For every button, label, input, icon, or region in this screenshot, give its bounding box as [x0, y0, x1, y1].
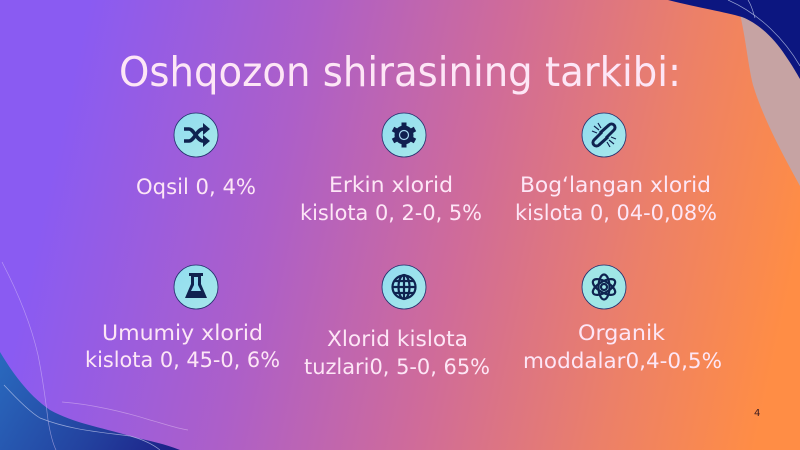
item: Xlorid kislota tuzlari: tuzlari0, 5-0, 65% — [304, 355, 490, 379]
icon: globe — [382, 265, 426, 309]
label: Umumiy xlorid — [102, 321, 263, 345]
item: Organik moddalar — [523, 265, 722, 373]
item: Organik moddalar: moddalar0,4-0,5% — [523, 349, 722, 373]
decoration: top right navy shape — [668, 0, 800, 79]
item: Xlorid kislota tuzlari — [304, 265, 490, 379]
item: Bog'langan xlorid kislota: kislota 0, 04-0,08% — [515, 201, 717, 225]
icon: broken chain — [582, 113, 626, 157]
label: Xlorid kislota — [327, 327, 468, 351]
item: Umumiy xlorid kislota — [85, 265, 280, 372]
icon: flask — [174, 265, 218, 309]
decoration: top right grey blob — [740, 14, 800, 186]
icon: gear — [382, 113, 426, 157]
item: Erkin xlorid kislota — [300, 113, 482, 225]
icon: shuffle arrows — [174, 113, 218, 157]
item: Umumiy xlorid kislota: kislota 0, 45-0, 6% — [85, 348, 280, 372]
label: Oqsil 0, 4% — [136, 175, 256, 199]
title: Oshqozon shirasining tarkibi: — [119, 48, 681, 96]
label: Erkin xlorid — [329, 173, 453, 197]
icon: atom — [582, 265, 626, 309]
item: Erkin xlorid kislota: kislota 0, 2-0, 5% — [300, 201, 482, 225]
slide number: 4 — [754, 408, 760, 419]
decoration: bottom left blue shape — [0, 262, 188, 450]
item: Oqsil — [136, 113, 256, 199]
label: Bog‘langan xlorid — [520, 173, 711, 197]
item: Bog'langan xlorid kislota — [515, 113, 717, 225]
label: Organik — [578, 321, 666, 345]
